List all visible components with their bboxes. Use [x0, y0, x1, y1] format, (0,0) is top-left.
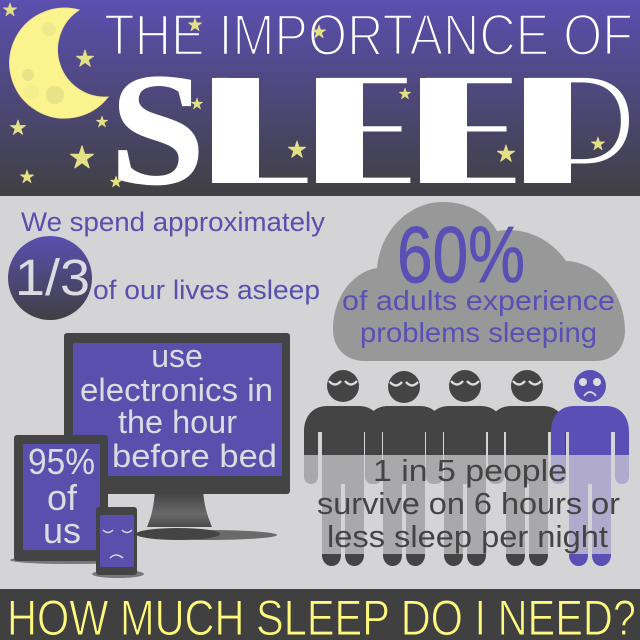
text: use electronics in the hour before bed: electronics in — [80, 372, 273, 408]
text: problems sleeping: problems sleeping — [360, 317, 597, 348]
text: of our lives asleep: of our lives asleep — [93, 275, 320, 305]
text: use electronics in the hour before bed — [80, 338, 277, 474]
badge: one third — [8, 236, 92, 320]
stat: 60 percent: 60% — [397, 210, 525, 299]
icon: crescent moon — [10, 8, 108, 118]
panel: electronics devices — [10, 333, 290, 578]
text: one in five people survive on six hours or less: less sleep per night — [327, 519, 608, 554]
icon: cloud — [333, 202, 625, 361]
title: sleep: L — [193, 38, 320, 222]
title: sleep: E — [302, 38, 422, 222]
header banner — [0, 0, 640, 196]
title: sleep: E — [407, 38, 527, 222]
stat: 95 percent of us — [28, 441, 95, 551]
text: use electronics in the hour before bed: the hour — [118, 404, 237, 440]
icon: stars — [3, 3, 605, 187]
text: one in five people survive on six hours or less — [317, 453, 620, 554]
text: of adults experience: of adults experience — [342, 285, 615, 316]
panel: one third of lives — [8, 207, 325, 320]
icon: sad phone — [92, 507, 144, 578]
header gradient background — [0, 0, 640, 196]
text: one in five people survive on six hours or less: 1 in 5 people — [373, 453, 567, 488]
icon: desktop monitor — [64, 333, 290, 540]
icon: tablet — [10, 435, 130, 564]
text: one in five people survive on six hours or less: survive on 6 hours or — [317, 486, 620, 521]
panel: cloud 60 percent — [333, 202, 625, 361]
text: use electronics in the hour before bed: before bed — [112, 438, 277, 474]
icon: sad purple person — [551, 370, 629, 566]
translucent text backdrop — [300, 455, 640, 554]
panel: one in five people — [300, 370, 640, 566]
title: sleep: S — [110, 40, 205, 218]
text: we spend approximately: We spend approximately — [21, 207, 325, 237]
stat: 95 percent of us: 95% — [28, 441, 95, 482]
stat: 95 percent of us: of — [47, 477, 78, 518]
badge: one third: 1/3 — [15, 249, 90, 306]
icon: four sleeping people — [304, 370, 566, 566]
stat: 95 percent of us: us — [43, 510, 81, 551]
text: use electronics in the hour before bed: use — [151, 338, 203, 374]
title: sleep — [118, 76, 629, 186]
footer banner — [0, 589, 640, 640]
